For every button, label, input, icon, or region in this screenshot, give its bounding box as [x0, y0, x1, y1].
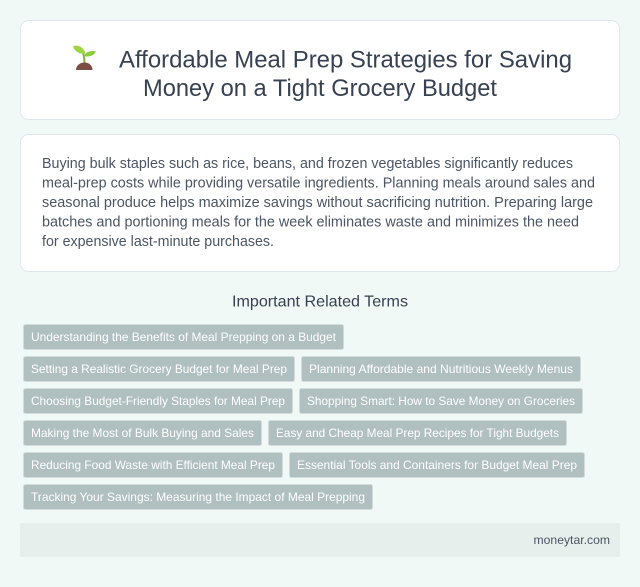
tag — [24, 452, 282, 478]
tag — [24, 484, 372, 510]
footer bar — [20, 523, 620, 557]
heading: related terms: Important Related Terms — [232, 294, 408, 310]
summary text: meal-prep costs while providing versatile ingredients. Planning meals around sales and — [42, 176, 595, 192]
tag: Setting a Realistic Grocery Budget for Meal Prep — [31, 362, 287, 376]
tag: Making the Most of Bulk Buying and Sales — [31, 426, 254, 440]
tag — [300, 388, 582, 414]
tag: Planning Affordable and Nutritious Weekly Menus — [309, 362, 573, 376]
panel: title card — [20, 20, 620, 120]
tag — [24, 324, 344, 350]
summary text: batches and portioning meals for the week eliminates waste and minimizes the need — [42, 214, 579, 230]
tag — [290, 452, 584, 478]
tag — [24, 420, 262, 446]
summary text — [42, 156, 595, 250]
title: Affordable Meal Prep Strategies for Saving — [119, 46, 572, 74]
tag — [24, 356, 294, 382]
tag: Understanding the Benefits of Meal Prepping on a Budget — [31, 330, 337, 344]
summary text: seasonal produce helps maximize savings without sacrificing nutrition. Preparing large — [42, 195, 593, 211]
icon: seedling — [73, 46, 96, 70]
title — [119, 46, 572, 102]
tags list — [24, 324, 584, 510]
tag — [24, 388, 292, 414]
tag: Easy and Cheap Meal Prep Recipes for Tight Budgets — [276, 426, 559, 440]
panel: summary card — [20, 134, 620, 272]
tag: Essential Tools and Containers for Budget Meal Prep — [297, 458, 577, 472]
footer source: moneytar.com — [534, 533, 610, 547]
tag: Shopping Smart: How to Save Money on Groceries — [307, 394, 575, 408]
title: Money on a Tight Grocery Budget — [143, 75, 497, 102]
tag — [268, 420, 566, 446]
tag: Choosing Budget-Friendly Staples for Meal Prep — [31, 394, 285, 408]
tag: Tracking Your Savings: Measuring the Impact of Meal Prepping — [31, 490, 365, 504]
summary text: Buying bulk staples such as rice, beans, and frozen vegetables significantly reduces — [42, 156, 573, 172]
summary text: for expensive last-minute purchases. — [42, 234, 274, 250]
tag: Reducing Food Waste with Efficient Meal Prep — [31, 458, 275, 472]
tag — [302, 356, 580, 382]
